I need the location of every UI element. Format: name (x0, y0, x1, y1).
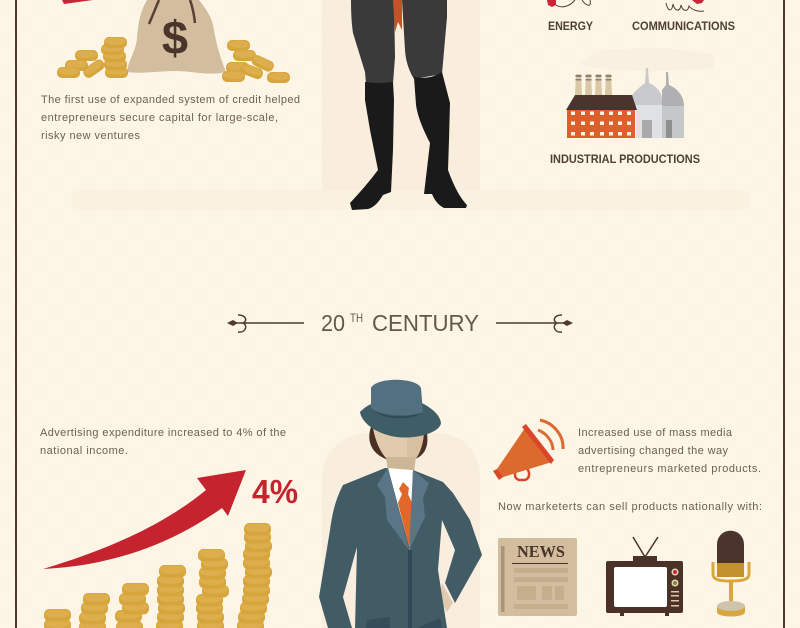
text: advertising expenditure: national income. (40, 445, 128, 457)
text: credit: The first use of expanded system of credit helped (41, 94, 300, 106)
text: credit: risky new ventures (41, 130, 140, 142)
arrow: rising expenditure (43, 470, 246, 569)
icon: newspaper (498, 538, 577, 616)
icon: factory (566, 47, 714, 138)
coins: left pile (57, 37, 128, 80)
icon: microphone (713, 531, 749, 616)
text: advertising expenditure: Advertising expenditure increased to 4% of the (40, 427, 286, 439)
text: sell nationally: Now marketerts can sell products nationally with: (498, 501, 762, 513)
text: mass media: advertising changed the way (578, 445, 728, 457)
icon: communications (666, 0, 704, 11)
right border (783, 0, 785, 628)
ornament: right (496, 315, 573, 332)
panel: figure backdrop top (322, 0, 480, 191)
heading: 20th century: TH (350, 311, 363, 325)
figure: legs and boots (350, 0, 467, 210)
figure: man in suit and hat (319, 380, 482, 628)
icon: money bag: $ (162, 11, 188, 64)
chart: coin stacks (44, 523, 272, 628)
panel: figure backdrop bottom (322, 433, 480, 628)
left border (15, 0, 17, 628)
ground shadow (72, 190, 750, 210)
label: 4%: 4% (252, 473, 298, 510)
text: advertising expenditure (40, 427, 286, 457)
icon: television (606, 537, 683, 616)
icon: money bag (127, 0, 226, 74)
text: credit (41, 94, 300, 142)
heading: 20th century: 20 (321, 310, 345, 336)
label: communications: COMMUNICATIONS (632, 21, 735, 33)
icon: red flag fragment (62, 0, 93, 4)
icon: megaphone (493, 420, 563, 480)
ornament: left (227, 315, 304, 332)
text: mass media: Increased use of mass media (578, 427, 733, 439)
label: energy: ENERGY (548, 21, 593, 33)
heading: 20th century: CENTURY (372, 310, 479, 336)
icon: energy (547, 0, 590, 7)
coins: right pile (222, 40, 290, 83)
text: mass media: entrepreneurs marketed products. (578, 463, 761, 475)
label: industrial productions: INDUSTRIAL PRODUCTIONS (550, 154, 700, 166)
text: mass media (578, 427, 761, 475)
icon: newspaper: NEWS (517, 542, 565, 561)
heading: 20th century (321, 310, 479, 336)
text: credit: entrepreneurs secure capital for large-scale, (41, 112, 278, 124)
